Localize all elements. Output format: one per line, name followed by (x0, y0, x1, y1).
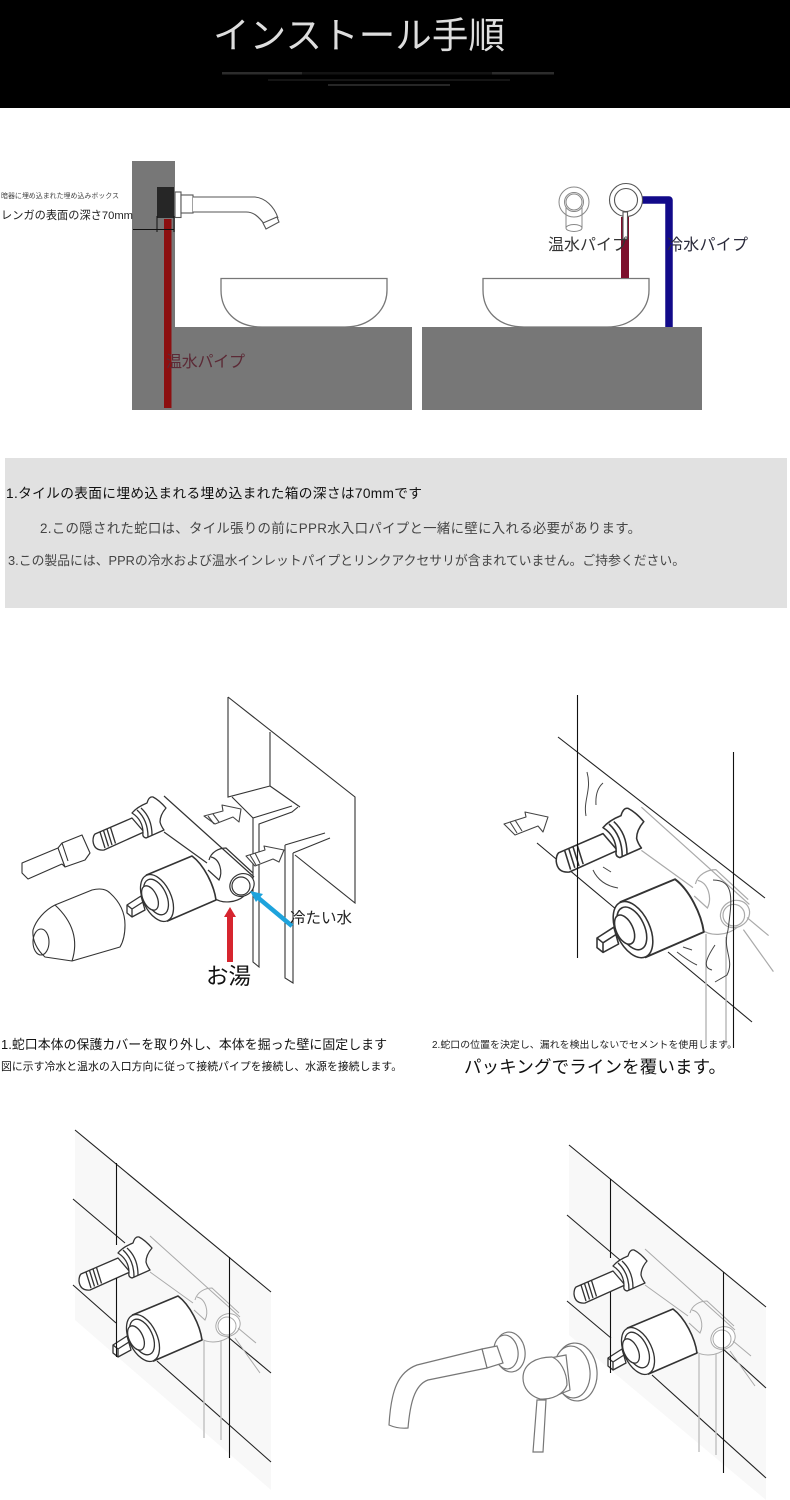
panel: side view installation diagram (1, 161, 412, 410)
label: hot water: お湯 (206, 964, 251, 989)
vertical guides (578, 695, 734, 1048)
step 1 illustration (22, 697, 355, 989)
step 1 caption (1, 1037, 402, 1073)
tile lines (73, 1130, 271, 1462)
label: hot pipe: 温水パイプ (548, 236, 628, 254)
supply pipes (706, 934, 726, 1045)
label: cold water: 冷たい水 (290, 909, 353, 927)
panel: front view installation diagram (422, 184, 748, 410)
cold water arrow (250, 891, 292, 926)
valve embedded (556, 807, 773, 972)
protective cap (33, 889, 125, 961)
arrow (504, 812, 548, 835)
pipe connector (22, 835, 90, 879)
spout (389, 1330, 528, 1428)
step 2 caption: 2.蛇口の位置を決定し、漏れを検出しないでセメントを使用します。 (432, 1038, 737, 1051)
spout side view (175, 192, 279, 229)
step 1 caption: 1.蛇口本体の保護カバーを取り外し、本体を掘った壁に固定します (1, 1037, 387, 1052)
valve (79, 1236, 260, 1373)
step 2 caption: パッキングでラインを覆います。 (464, 1057, 726, 1077)
cold pipe (642, 200, 669, 327)
hot water arrow (224, 907, 236, 962)
wall lines (537, 737, 765, 1022)
handle (523, 1341, 599, 1452)
valve exploded (93, 796, 258, 927)
step 1 caption: 図に示す冷水と温水の入口方向に従って接続パイプを接続し、水源を接続します。 (1, 1059, 402, 1073)
header band (0, 0, 790, 108)
cement marks (585, 772, 731, 982)
tiled wall (569, 1145, 766, 1500)
valve (574, 1249, 755, 1386)
tiled wall (75, 1130, 271, 1490)
step 2 illustration (504, 695, 773, 1048)
tile lines (567, 1145, 766, 1478)
supply pipes (699, 1354, 716, 1455)
label: box: 暗器に埋め込まれた埋め込みボックス (1, 191, 119, 200)
depth dimension (133, 216, 174, 232)
step 3 illustration (73, 1130, 271, 1490)
note 3: 3.この製品には、PPRの冷水および温水インレットパイプとリンクアクセサリが含まれていません。ご持参ください。 (8, 553, 685, 568)
label: cold pipe: 冷水パイプ (667, 236, 748, 254)
handle front view (610, 184, 642, 239)
step 4 illustration (389, 1145, 766, 1500)
vertical tile lines (610, 1179, 724, 1473)
label: hot pipe: 温水パイプ (166, 353, 245, 371)
note 1: 1.タイルの表面に埋め込まれる埋め込まれた箱の深さは70mmです (6, 486, 422, 501)
supply pipes (204, 1341, 221, 1440)
hot pipe front view (621, 217, 629, 278)
title: インストール手順 (213, 15, 505, 56)
note 2: 2.この隠された蛇口は、タイル張りの前にPPR水入口パイプと一緒に壁に入れる必要があります。 (40, 520, 641, 536)
hot pipe side view (164, 219, 172, 408)
wall recess (228, 697, 355, 983)
spout front view (559, 187, 589, 232)
panel: notes (5, 458, 787, 608)
arrows (204, 805, 284, 866)
embedded box (157, 187, 174, 218)
vertical tile lines (116, 1163, 230, 1458)
step 2 caption (432, 1038, 737, 1077)
basin side view (221, 278, 387, 327)
label: depth: レンガの表面の深さ70mm (1, 209, 133, 222)
basin front view (483, 278, 649, 327)
